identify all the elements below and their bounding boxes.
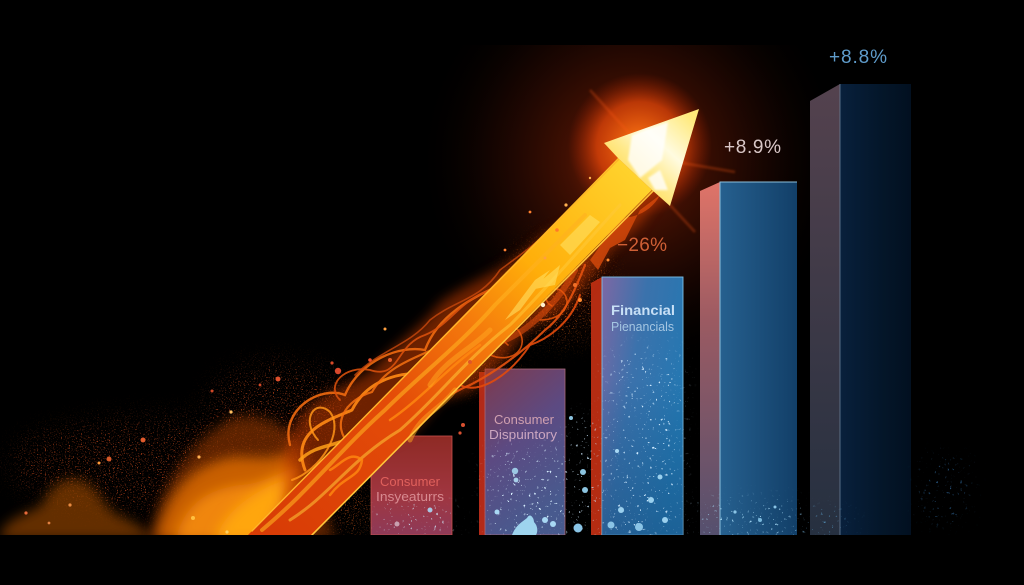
- fine orange particle dust: [10, 240, 610, 535]
- arrow head: [604, 109, 699, 206]
- bar label: Financial Financials: [612, 305, 674, 331]
- bar 4: [700, 182, 797, 535]
- arrow shaft: [248, 158, 652, 535]
- value label: +8.8%: +8.8%: [829, 47, 887, 68]
- bar 3: Financials: [591, 277, 683, 535]
- arrow shaft flames: [252, 158, 654, 535]
- flames wrapping the arrow: [284, 195, 660, 530]
- bar label: Consumer Insyeaturrs: Consumer: [380, 474, 441, 489]
- arrow: [248, 109, 699, 535]
- bar label: Consumer Insyeaturrs: [377, 477, 444, 504]
- bar label: Consumer Dispuintory: Consumer: [494, 412, 555, 427]
- smoke cloud: bottom left fire: [0, 416, 335, 540]
- arrow head crystal facets: [628, 122, 668, 190]
- bar 1: Consumer: [371, 436, 452, 535]
- bar 5: [810, 84, 911, 535]
- bar label: Consumer Dispuintory: [490, 415, 557, 442]
- bar label: Financial Financials: Financial: [611, 302, 675, 318]
- bar label: Consumer Insyeaturrs: Insyeaturrs: [376, 489, 445, 504]
- blue paint splatter over bars: [380, 350, 965, 535]
- bar label: Consumer Dispuintory: Dispuintory: [489, 427, 558, 442]
- bright particles: [24, 177, 609, 534]
- background glow behind arrow head: [464, 45, 797, 322]
- value label: +8.9%: +8.9%: [724, 137, 781, 158]
- bar label: Financial Financials: Pienancials: [611, 319, 674, 334]
- value label: -26%: −26%: [617, 235, 667, 256]
- bar 2: Consumer Discretionary: [479, 369, 565, 535]
